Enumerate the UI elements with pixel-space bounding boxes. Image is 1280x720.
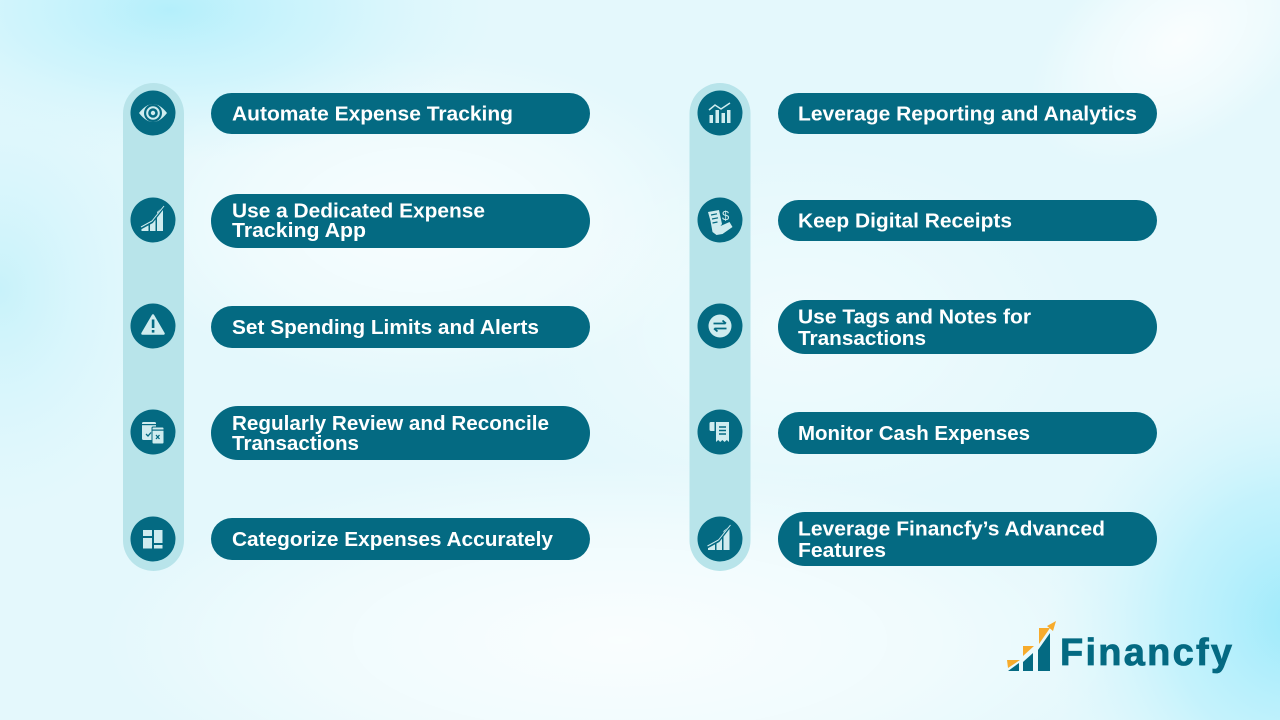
pill: Monitor Cash Expenses: Monitor Cash Expenses bbox=[798, 423, 1030, 445]
pill: Leverage Financfy's Advanced Features bbox=[778, 512, 1157, 566]
pill: Leverage Reporting and Analytics bbox=[778, 93, 1157, 134]
panel: left timeline track bbox=[123, 83, 184, 571]
pill: Automate Expense Tracking: Automate Expense Tracking bbox=[232, 104, 513, 126]
icon: growth bars bbox=[698, 516, 742, 562]
pill: Use Tags and Notes for Transactions: Use Tags and Notes for bbox=[798, 306, 1031, 328]
pill: Leverage Financfy's Advanced Features: Features bbox=[798, 540, 886, 562]
step: Use Tags and Notes for Transactions bbox=[698, 300, 1157, 354]
icon: bar chart with trend bbox=[698, 90, 742, 136]
logo wordmark: Financfy bbox=[1060, 632, 1232, 674]
pill: Automate Expense Tracking bbox=[211, 93, 590, 134]
pill: Set Spending Limits and Alerts: Set Spending Limits and Alerts bbox=[232, 317, 539, 339]
pill: Regularly Review and Reconcile Transactions bbox=[211, 406, 590, 460]
pill: Use a Dedicated Expense Tracking App bbox=[211, 194, 590, 248]
panel: right timeline track bbox=[690, 83, 750, 571]
icon: two documents bbox=[130, 410, 176, 454]
step: Regularly Review and Reconcile Transactions bbox=[130, 406, 590, 460]
icon: receipt and hand with dollar bbox=[698, 198, 742, 242]
icon: warning triangle bbox=[130, 304, 176, 348]
pill: Leverage Reporting and Analytics: Leverage Reporting and Analytics bbox=[798, 104, 1137, 126]
logo: Financfy bbox=[1007, 621, 1232, 674]
pill: Regularly Review and Reconcile Transactions: Regularly Review and Reconcile bbox=[232, 413, 549, 435]
step: Set Spending Limits and Alerts bbox=[130, 304, 590, 348]
pill: Categorize Expenses Accurately bbox=[211, 518, 590, 560]
step: Keep Digital Receipts bbox=[698, 198, 1157, 242]
pill: Leverage Financfy's Advanced Features: Leverage Financfy’s Advanced bbox=[798, 518, 1105, 540]
step: Leverage Financfy's Advanced Features bbox=[698, 512, 1157, 566]
pill: Keep Digital Receipts bbox=[778, 200, 1157, 241]
icon: eye bbox=[130, 90, 176, 136]
icon: layout grid bbox=[130, 516, 176, 562]
step: Use a Dedicated Expense Tracking App bbox=[130, 194, 590, 248]
pill: Categorize Expenses Accurately: Categorize Expenses Accurately bbox=[232, 529, 554, 551]
pill: Use Tags and Notes for Transactions bbox=[778, 300, 1157, 354]
pill: Regularly Review and Reconcile Transactions: Transactions bbox=[232, 433, 359, 455]
icon: receipt and hand with dollar: $ bbox=[722, 208, 730, 223]
pill: Set Spending Limits and Alerts bbox=[211, 306, 590, 348]
icon: paper bill bbox=[698, 410, 742, 454]
pill: Use a Dedicated Expense Tracking App: Tracking App bbox=[232, 220, 366, 242]
pill: Use Tags and Notes for Transactions: Transactions bbox=[798, 328, 926, 350]
pill: Monitor Cash Expenses bbox=[778, 412, 1157, 454]
icon: exchange arrows bbox=[698, 304, 742, 348]
step: Leverage Reporting and Analytics bbox=[698, 90, 1157, 136]
step: Automate Expense Tracking bbox=[130, 90, 590, 136]
icon: logo chart bbox=[1007, 621, 1056, 671]
pill: Use a Dedicated Expense Tracking App: Use a Dedicated Expense bbox=[232, 200, 485, 222]
pill: Keep Digital Receipts: Keep Digital Receipts bbox=[798, 210, 1012, 232]
icon: growth bars bbox=[130, 198, 176, 242]
step: Monitor Cash Expenses bbox=[698, 410, 1157, 454]
step: Categorize Expenses Accurately bbox=[130, 516, 590, 562]
